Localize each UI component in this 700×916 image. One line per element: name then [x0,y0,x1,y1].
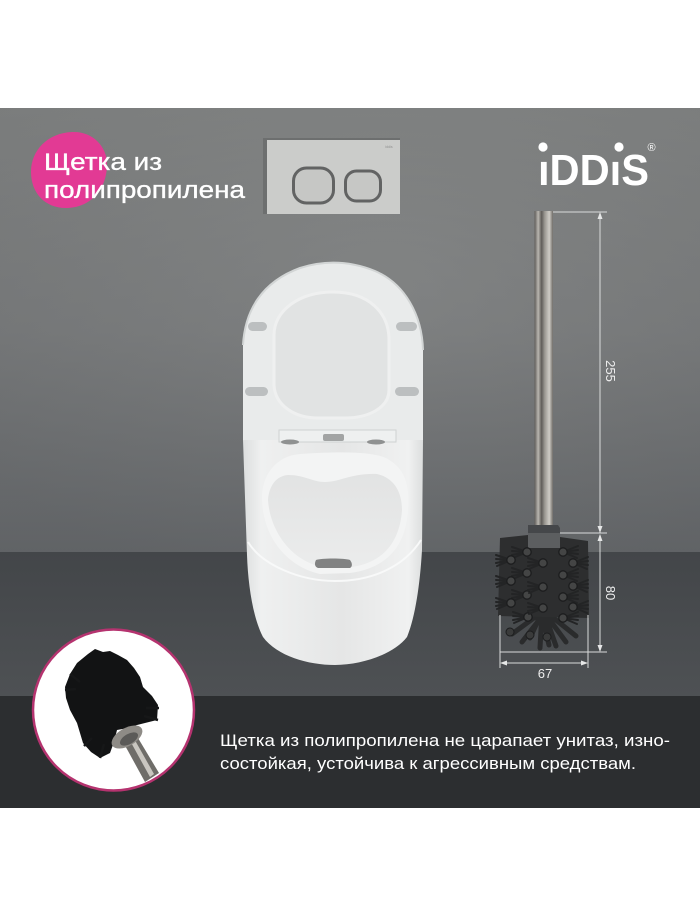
toilet lid raised [243,263,423,440]
lid inner panel [274,292,389,418]
bowl front edge [248,540,421,581]
dimension: 80: 80 [603,586,618,600]
bowl rim and opening [262,452,408,574]
brush product [496,211,589,648]
dark caption band [0,696,700,808]
heading: полипропилена [44,177,245,204]
flush button small [346,171,380,201]
pink circle accent [31,132,107,208]
inset circle: brush close-up [33,630,194,790]
dimension: 80 [500,533,618,652]
dimension lines [500,212,618,681]
close-up bristles [65,649,158,758]
flush button large [294,168,334,203]
toilet [243,263,423,665]
dimension: 67 [500,615,588,681]
hinge bar [279,430,396,444]
brush hub [528,533,560,548]
logo: IDDIS: ıDDıS [538,146,649,195]
caption text: Щетка из полипропилена не царапает унитаз, изно- [220,732,670,750]
bristle tufts [512,547,531,558]
dimension: 255: 255 [603,360,618,382]
photo background: wall [0,108,700,553]
caption text: состойкая, устойчива к агрессивным средствам. [220,755,636,773]
brush rod [534,211,553,527]
brush head [496,533,589,648]
flush plate: iddis [385,145,393,149]
logo: IDDIS: ® [648,142,656,154]
heading: Щетка из [44,149,162,176]
lid bumpers [245,322,419,396]
bowl drain [315,558,352,568]
flush plate [263,138,400,214]
dimension: 255 [553,212,618,533]
close-up rod [126,739,159,782]
brush collar [528,525,560,533]
floor band [0,552,700,697]
toilet bowl body [243,440,423,665]
dimension: 67: 67 [538,666,552,681]
lower bristles [512,612,576,648]
close-up collar [112,726,142,748]
